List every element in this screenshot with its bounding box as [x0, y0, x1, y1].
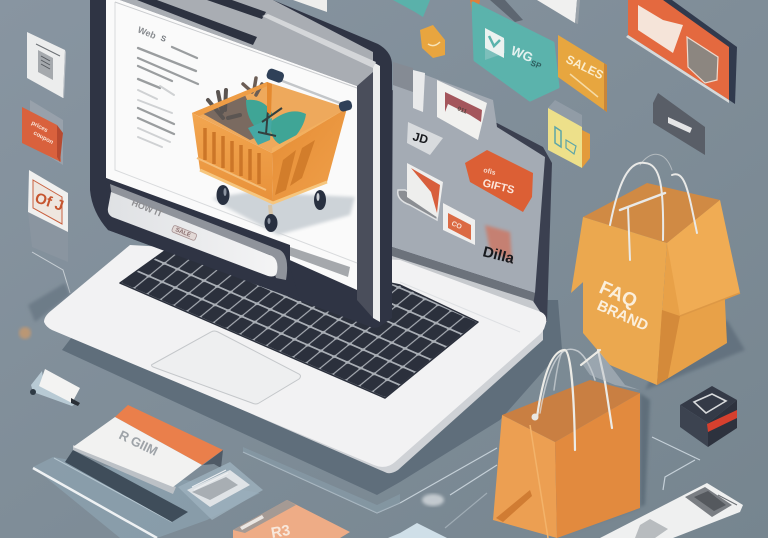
- back screen white bar: [413, 70, 425, 112]
- bag lettering: FAQ: [596, 277, 640, 312]
- back screen orange callout: GIFTS: [481, 177, 516, 197]
- floating card: left red: coupon: [32, 130, 54, 146]
- monitor white screen: [106, 0, 357, 290]
- floating card: left red: [22, 100, 63, 165]
- back screen blurred label: [481, 225, 517, 268]
- white card above the monitor: [293, 0, 327, 12]
- chin gray bar: [288, 247, 350, 277]
- back screen orange callout: [465, 150, 533, 212]
- left connector and blur block: [28, 252, 70, 322]
- monitor upper dark stripe: [207, 0, 266, 19]
- floating card: left white coupon: Of J: [33, 190, 66, 215]
- back screen product card: 011: [456, 106, 468, 116]
- screen heading text: Web: [136, 25, 158, 41]
- floating card: orange large: [626, 0, 737, 104]
- floating card: white, top: [537, 0, 580, 24]
- chin shade: [110, 184, 287, 280]
- white device card, bottom right: [600, 483, 743, 538]
- floating tag: small orange: [420, 25, 445, 58]
- dark cube: [680, 386, 737, 447]
- orange dot: [19, 327, 31, 339]
- chin white button bar: [108, 192, 277, 276]
- floating tag: small orange dot, top: [470, 0, 480, 12]
- chin white button bar: SALE: [174, 227, 191, 239]
- laptop base: [44, 245, 546, 473]
- cart shadow: [212, 192, 355, 235]
- cart wheels: [216, 185, 326, 232]
- bag lettering: [594, 277, 651, 335]
- book with orange spine: R GIIM: [117, 427, 160, 459]
- main monitor: [90, 0, 392, 328]
- floating note: yellow: [548, 100, 590, 168]
- monitor light stripe: [262, 14, 376, 68]
- bag lettering: BRAND: [594, 297, 651, 335]
- cart front: [192, 113, 273, 203]
- connector node: [422, 494, 444, 506]
- floating card: teal: [473, 0, 558, 100]
- small white tag, lower left: [30, 369, 80, 406]
- keyboard: [120, 240, 478, 398]
- monitor top bezel: [120, 0, 373, 86]
- bag handles: [610, 154, 697, 260]
- floating card: teal: WG: [509, 43, 535, 65]
- screen heading text: S: [159, 34, 168, 44]
- cart handle: [265, 68, 353, 112]
- monitor frame: [90, 0, 392, 328]
- back screen blurred label: DilIa: [481, 243, 517, 268]
- trackpad: [152, 331, 300, 404]
- back screen logo card: [407, 122, 443, 155]
- back screen red card: [398, 163, 443, 220]
- laptop shadow: [62, 300, 562, 495]
- lower bag handles: [537, 350, 612, 450]
- back screen orange callout: ofis: [483, 167, 496, 177]
- floating card: left red: prices: [30, 120, 49, 134]
- floating card: small teal, top: [393, 0, 430, 17]
- back screen small orange card: [443, 203, 475, 245]
- monitor right column: [357, 70, 373, 318]
- connector lines on the desk: [243, 437, 700, 528]
- back screen product card: [437, 80, 487, 140]
- floating tag: yellow-orange: [558, 35, 607, 112]
- chin dark: [106, 178, 300, 300]
- monitor dark stripe: [137, 0, 257, 45]
- book with orange spine: [33, 405, 260, 538]
- cart side: [272, 108, 347, 203]
- screen heading text: [136, 25, 168, 44]
- upper shopping bag: [571, 154, 745, 390]
- desk glass strip: [243, 447, 400, 513]
- light blue card, bottom: [388, 523, 447, 538]
- small white card beside book: [178, 462, 263, 520]
- back screen logo card: JD: [411, 129, 430, 147]
- lower bag far handles: [540, 349, 595, 413]
- cart slats: [205, 128, 259, 184]
- shopping cart: [192, 68, 353, 232]
- lower shopping bag: [493, 349, 650, 538]
- floating card: left white coupon: [28, 170, 68, 262]
- back screen small orange card: CO: [450, 220, 463, 231]
- floating card: left document: [27, 32, 66, 98]
- back screen: [392, 62, 552, 322]
- floating tag: yellow-orange: SALES: [564, 52, 606, 82]
- floating pill: dark gray: [653, 93, 705, 155]
- cart plants: [208, 78, 306, 146]
- chin white button bar: HOW IT: [130, 198, 165, 219]
- back screen panel: [392, 63, 545, 293]
- floating card: teal: SP: [529, 59, 543, 71]
- back screen frame: [392, 90, 552, 322]
- peach card: [233, 500, 350, 538]
- screen text lines: [138, 47, 198, 147]
